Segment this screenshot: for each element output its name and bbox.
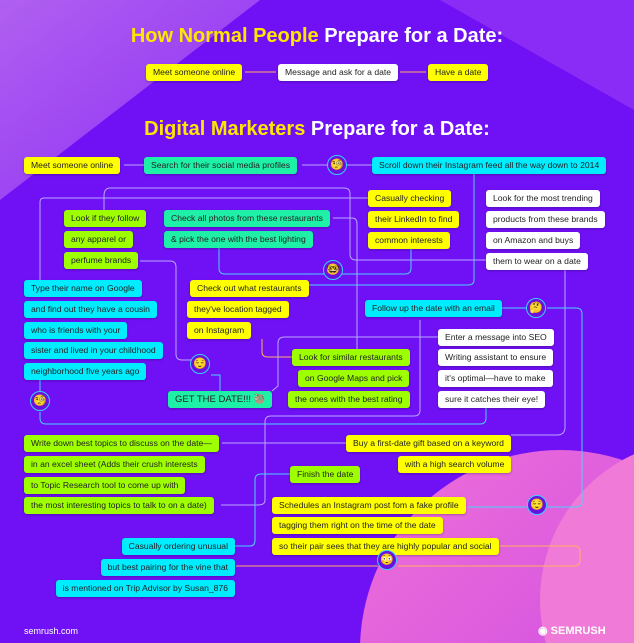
step: meet online [24, 157, 120, 174]
emoji [377, 550, 397, 570]
step: seo: it's optimal—have to make [445, 373, 546, 383]
step: search social: Search for their social media profiles [151, 160, 290, 170]
step: similar restaurants: on Google Maps and pick [305, 373, 402, 383]
emoji: 🤔 [529, 302, 543, 314]
emoji [323, 260, 343, 280]
step: photos [163, 210, 331, 250]
step: photos: Check all photos from these restaurants [171, 213, 323, 223]
step: google: and find out they have a cousin [31, 304, 150, 314]
emoji: 😳 [380, 554, 394, 566]
step: instagram post: tagging them right on the time of the date [279, 520, 436, 530]
step: get the date [168, 391, 272, 408]
step: restaurants: Check out what restaurants [197, 283, 302, 293]
title: normal people: How Normal People Prepare for a Date: [131, 25, 503, 47]
step: apparel [63, 210, 147, 271]
step: have date: Have a date [435, 67, 481, 77]
step: photos: & pick the one with the best lighting [171, 234, 306, 244]
step: meet online: Meet someone online [31, 160, 113, 170]
emoji: 😌 [193, 358, 207, 370]
step: apparel: any apparel or [71, 234, 126, 244]
step: instagram post [271, 497, 500, 557]
step: google: sister and lived in your childhood [31, 345, 156, 355]
step: google: who is friends with your [31, 325, 120, 335]
emoji: 😌 [530, 499, 544, 511]
step: meet [146, 64, 242, 81]
step: follow up email [365, 300, 502, 317]
step: seo: Writing assistant to ensure [445, 352, 546, 362]
emoji [526, 298, 546, 318]
emoji: 🤓 [326, 264, 340, 276]
emoji [527, 495, 547, 515]
step: have date [428, 64, 488, 81]
step: scroll instagram: Scroll down their Instagram feed all the way down to 2014 [379, 160, 599, 170]
step: finish: Finish the date [297, 469, 353, 479]
emoji: 🧐 [33, 395, 47, 407]
step: google: Type their name on Google [31, 283, 135, 293]
footer: logo: ◉ SEMRUSH [538, 625, 606, 637]
step: linkedin [367, 190, 460, 251]
step: wine: but best pairing for the vine that [108, 562, 228, 572]
step: instagram post: Schedules an Instagram post fom a fake profile [279, 500, 459, 510]
step: message: Message and ask for a date [285, 67, 391, 77]
step: restaurants [186, 280, 310, 341]
step: apparel: perfume brands [71, 255, 131, 265]
step: linkedin: Casually checking [375, 193, 444, 203]
title: digital marketers: Digital Marketers Prepare for a Date: [144, 118, 490, 140]
footer: site: semrush.com [24, 626, 78, 636]
step: gift: with a high search volume [405, 459, 504, 469]
step: topics: the most interesting topics to talk to on a date) [31, 500, 207, 510]
step: linkedin: common interests [375, 235, 443, 245]
emoji: 🧐 [330, 159, 344, 171]
step: wine [55, 538, 236, 599]
arrows [245, 72, 426, 73]
step: google: neighborhood five years ago [31, 366, 139, 376]
step: amazon: on Amazon and buys [493, 235, 573, 245]
step: topics [23, 435, 220, 516]
step: instagram post: so their pair sees that they are highly popular and social [279, 541, 492, 551]
step: seo: sure it catches their eye! [445, 394, 538, 404]
step: amazon: them to wear on a date [493, 256, 581, 266]
step: topics: in an excel sheet (Adds their crush interests [31, 459, 198, 469]
flow: digital marketers [23, 155, 607, 599]
step: linkedin: their LinkedIn to find [375, 214, 452, 224]
step: amazon: products from these brands [493, 214, 598, 224]
flow: normal people [145, 64, 489, 83]
step: search social [144, 157, 297, 174]
step: finish [290, 466, 360, 483]
step: google [23, 280, 164, 382]
step: wine: Casually ordering unusual [129, 541, 228, 551]
step: amazon: Look for the most trending [493, 193, 593, 203]
emoji [30, 391, 50, 411]
step: scroll instagram [372, 157, 606, 174]
emoji [190, 354, 210, 374]
step: similar restaurants: the ones with the best rating [295, 394, 402, 404]
step: message [278, 64, 398, 81]
step: seo: Enter a message into SEO [445, 332, 547, 342]
step: restaurants: they've location tagged [194, 304, 282, 314]
step: gift: Buy a first-date gift based on a keyword [353, 438, 504, 448]
step: restaurants: on Instagram [194, 325, 244, 335]
emoji [327, 155, 347, 175]
step: follow up email: Follow up the date with an email [372, 303, 495, 313]
step: seo [437, 329, 555, 410]
step: gift [345, 435, 512, 475]
step: topics: Write down best topics to discuss on the date— [31, 438, 212, 448]
step: similar restaurants: Look for similar restaurants [299, 352, 403, 362]
step: apparel: Look if they follow [71, 213, 139, 223]
step: meet: Meet someone online [153, 67, 235, 77]
step: topics: to Topic Research tool to come up with [31, 480, 178, 490]
step: get the date: GET THE DATE!!! 🦥 [175, 394, 265, 405]
step: similar restaurants [287, 349, 411, 410]
step: amazon [485, 190, 606, 272]
step: wine: is mentioned on Trip Advisor by Susan_876 [63, 583, 228, 593]
